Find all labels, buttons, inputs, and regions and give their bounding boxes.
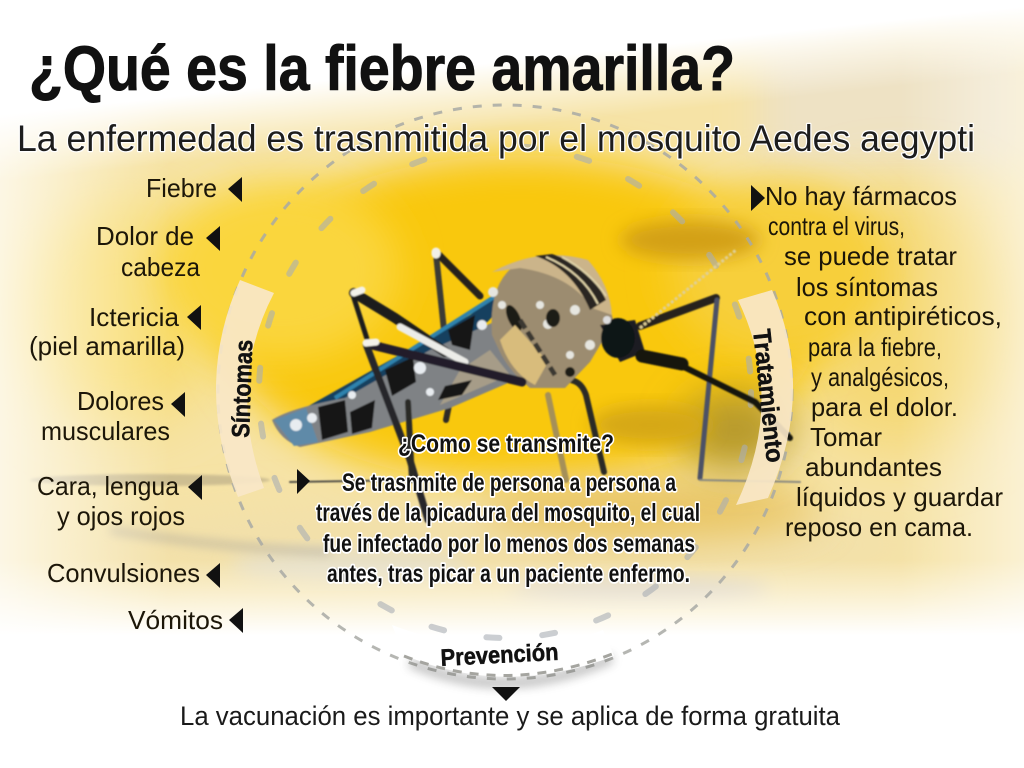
symptom: Dolor de cabeza: Dolor de bbox=[96, 221, 194, 251]
banner: Síntomas bbox=[216, 280, 274, 497]
thorax bbox=[492, 258, 614, 388]
banner: Prevención bbox=[392, 625, 614, 683]
symptom: Fiebre: Fiebre bbox=[146, 173, 217, 203]
treatment text: contra el virus, bbox=[768, 211, 905, 241]
symptom: Ictericia bbox=[29, 302, 201, 361]
symptom: Ictericia: Ictericia bbox=[89, 302, 180, 332]
far legs bbox=[290, 252, 800, 482]
icon: arrow bbox=[751, 185, 765, 211]
dashed circles bbox=[218, 105, 792, 679]
symptom: Ictericia: (piel amarilla) bbox=[29, 331, 185, 361]
symptom: Dolores musculares: Dolores bbox=[77, 386, 164, 416]
proboscis bbox=[680, 365, 790, 438]
water band bbox=[80, 500, 920, 590]
wing bbox=[305, 281, 520, 425]
treatment text: para la fiebre, bbox=[808, 332, 942, 362]
symptom: Cara, lengua y ojos rojos: y ojos rojos bbox=[57, 501, 185, 531]
how it transmits: fue infectado por lo menos dos semanas bbox=[323, 530, 695, 558]
how it transmits: través de la picadura del mosquito, el cual bbox=[316, 499, 700, 527]
how it transmits: Se trasnmite de persona a persona a bbox=[342, 469, 677, 497]
banner: Síntomas: Síntomas bbox=[227, 339, 258, 438]
symptoms list bbox=[29, 173, 243, 635]
dark out-of-focus shadows bbox=[620, 220, 760, 260]
icon: arrow down bbox=[492, 687, 520, 701]
icon: arrow bbox=[297, 469, 310, 494]
treatment text: abundantes bbox=[805, 452, 942, 482]
symptom: Convulsiones: Convulsiones bbox=[47, 558, 200, 588]
treatment text: Tomar bbox=[810, 422, 882, 452]
treatment text: reposo en cama. bbox=[785, 512, 973, 542]
treatment text: No hay fármacos bbox=[765, 181, 957, 211]
treatment text: se puede tratar bbox=[784, 241, 957, 271]
subtitle: La enfermedad es trasnmitida por el mosquito Aedes aegypti bbox=[17, 118, 975, 159]
treatment text: líquidos y guardar bbox=[796, 482, 1003, 512]
footer text: La vacunación es importante y se aplica de forma gratuita bbox=[180, 701, 841, 731]
title: ¿Qué es la fiebre amarilla? bbox=[29, 34, 735, 104]
head bbox=[600, 320, 645, 362]
mosquito bbox=[272, 250, 800, 520]
saturated centre bbox=[220, 155, 820, 485]
banner: Tratamiento: Tratamiento bbox=[747, 328, 789, 464]
how it transmits: antes, tras picar a un paciente enfermo. bbox=[327, 560, 690, 588]
symptom: Dolor de cabeza bbox=[96, 221, 220, 282]
treatment text bbox=[751, 181, 1003, 542]
heading: ¿Como se transmite? bbox=[398, 430, 614, 458]
treatment text: y analgésicos, bbox=[811, 362, 949, 392]
edge fades bbox=[0, 0, 170, 768]
banner: Prevención: Prevención bbox=[440, 639, 559, 672]
banner: Tratamiento bbox=[736, 290, 793, 505]
treatment text: con antipiréticos, bbox=[804, 301, 1002, 331]
symptom: Dolor de cabeza: cabeza bbox=[121, 252, 201, 282]
treatment text: para el dolor. bbox=[811, 392, 958, 422]
how it transmits bbox=[297, 430, 700, 588]
symptom: Cara, lengua y ojos rojos bbox=[37, 471, 202, 531]
treatment text: los síntomas bbox=[796, 272, 938, 302]
symptom: Dolores musculares bbox=[41, 386, 185, 446]
symptom: Vómitos: Vómitos bbox=[128, 605, 223, 635]
front legs bbox=[352, 290, 522, 520]
antenna bbox=[640, 250, 736, 328]
abdomen bbox=[272, 315, 540, 447]
symptom: Cara, lengua y ojos rojos: Cara, lengua bbox=[37, 471, 180, 501]
symptom: Dolores musculares: musculares bbox=[41, 416, 170, 446]
